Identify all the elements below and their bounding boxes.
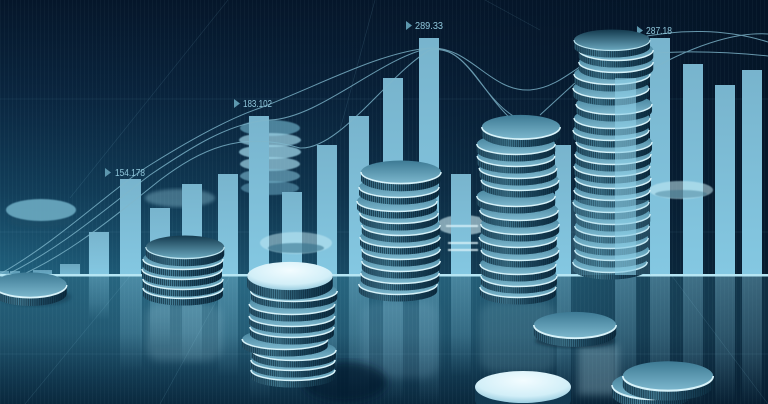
- coin stack far right: [573, 30, 653, 280]
- label: 154.178: 154.178: [115, 168, 145, 179]
- front coin stack with bright top: [242, 262, 337, 388]
- two coins in foreground right: [612, 361, 713, 404]
- coin stack center-right: [477, 115, 560, 304]
- coin stack center: [357, 160, 441, 302]
- bright coin in foreground: [475, 371, 571, 404]
- label: 289.33: 289.33: [415, 21, 443, 32]
- single coin on floor: [534, 312, 616, 348]
- coin on floor at left: [0, 272, 71, 306]
- bar reflections on floor: [89, 276, 762, 404]
- label: 183.102: [234, 99, 272, 110]
- label: 287.18: [637, 26, 672, 37]
- translucent bars over far right stack: [571, 78, 651, 275]
- baseline: [0, 274, 768, 276]
- cast shadow of front stack: [303, 362, 387, 402]
- stack reflections on floor: [146, 302, 618, 395]
- ghost coins behind chart: [6, 189, 489, 235]
- label: 183.102: 183.102: [243, 99, 272, 110]
- translucent ghost coins in front of bars: [260, 181, 713, 254]
- label: 154.178: [105, 168, 145, 179]
- trend lines: [0, 31, 768, 284]
- ghost blurred coin stack behind chart: [239, 120, 301, 195]
- bar chart: [0, 38, 762, 275]
- glossy floor: [0, 276, 768, 404]
- coin stack left: [142, 235, 224, 306]
- label: 287.18: 287.18: [646, 26, 672, 37]
- background: dark blue wall: [0, 0, 768, 276]
